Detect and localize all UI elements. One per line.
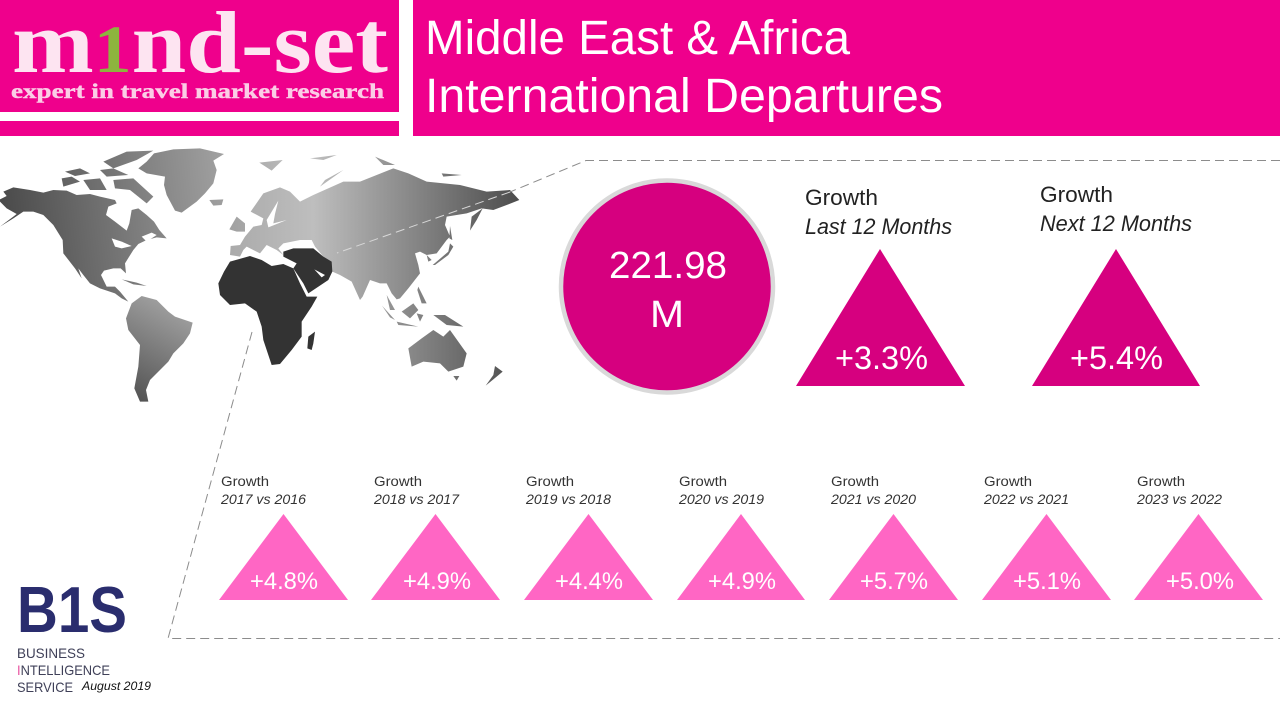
growth last 12 months (796, 185, 965, 386)
growth last 12 months: +3.3% (835, 340, 928, 376)
BIS logo: SERVICE (17, 679, 73, 695)
growth 2017 vs 2016: 2017 vs 2016 (220, 492, 307, 507)
growth 2020 vs 2019: Growth (679, 474, 727, 489)
growth 2022 vs 2021: +5.1% (1013, 568, 1081, 595)
growth 2018 vs 2017 (371, 474, 500, 600)
growth 2017 vs 2016: +4.8% (250, 568, 318, 595)
BIS logo: INTELLIGENCE (17, 662, 118, 678)
total value: M (650, 294, 684, 336)
growth next 12 months: +5.4% (1070, 340, 1163, 376)
growth 2021 vs 2020 (829, 474, 958, 600)
growth 2017 vs 2016: Growth (221, 474, 269, 489)
growth 2017 vs 2016 (219, 474, 348, 600)
report date: August 2019 (81, 681, 152, 693)
growth 2019 vs 2018: 2019 vs 2018 (525, 492, 612, 507)
logo tagline: expert in travel market research (11, 79, 384, 103)
growth next 12 months (1032, 182, 1200, 386)
header: title panel (413, 0, 1280, 136)
growth 2022 vs 2021: 2022 vs 2021 (983, 492, 1069, 507)
title: International Departures (425, 70, 943, 123)
dashed connector lines (168, 160, 1280, 638)
growth last 12 months: Last 12 Months (805, 214, 952, 239)
total value: 221.98 (609, 245, 727, 287)
growth last 12 months: Growth (805, 185, 878, 210)
growth 2021 vs 2020: +5.7% (860, 568, 928, 595)
growth next 12 months: Next 12 Months (1040, 211, 1192, 236)
header: logo panel (0, 0, 399, 136)
title: Middle East & Africa (425, 12, 850, 65)
growth 2022 vs 2021 (982, 474, 1111, 600)
BIS logo: BUSINESS (17, 645, 85, 661)
BIS logo (17, 573, 127, 695)
world map (0, 148, 519, 402)
growth 2019 vs 2018: Growth (526, 474, 574, 489)
growth 2021 vs 2020: 2021 vs 2020 (830, 492, 917, 507)
growth 2020 vs 2019 (677, 474, 805, 600)
growth 2018 vs 2017: +4.9% (403, 568, 471, 595)
total departures circle (561, 180, 773, 392)
BIS logo: B1S (17, 573, 127, 646)
growth 2023 vs 2022: Growth (1137, 474, 1185, 489)
growth 2018 vs 2017: Growth (374, 474, 422, 489)
growth 2023 vs 2022: 2023 vs 2022 (1136, 492, 1223, 507)
growth 2019 vs 2018 (524, 474, 653, 600)
growth 2022 vs 2021: Growth (984, 474, 1032, 489)
growth 2019 vs 2018: +4.4% (555, 568, 623, 595)
growth 2021 vs 2020: Growth (831, 474, 879, 489)
growth 2023 vs 2022 (1134, 474, 1263, 600)
growth next 12 months: Growth (1040, 182, 1113, 207)
growth 2020 vs 2019: 2020 vs 2019 (678, 492, 765, 507)
growth 2023 vs 2022: +5.0% (1166, 568, 1234, 595)
South America (126, 296, 193, 402)
growth 2020 vs 2019: +4.9% (708, 568, 776, 595)
growth 2018 vs 2017: 2018 vs 2017 (373, 492, 460, 507)
